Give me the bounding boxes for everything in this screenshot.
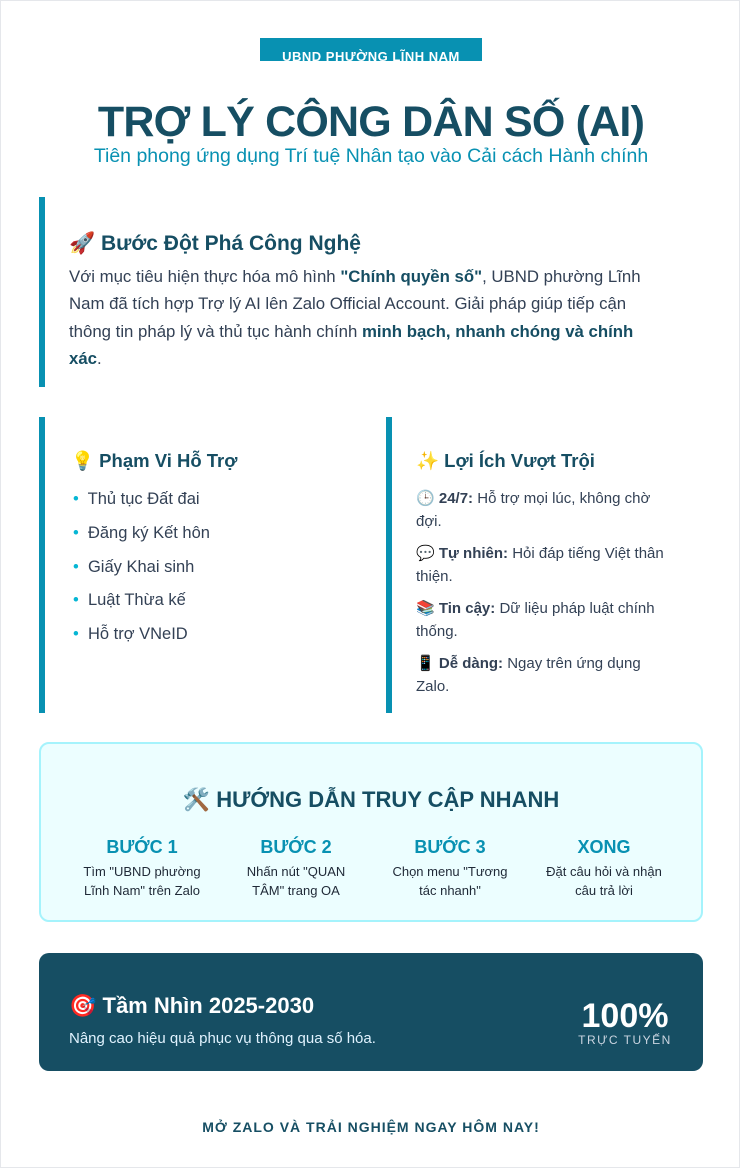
benefit list: 💬 Tự nhiên: Hỏi đáp tiếng Việt thân thiện.	[416, 545, 664, 585]
steps: Chọn menu "Tương	[392, 864, 508, 879]
steps: Lĩnh Nam" trên Zalo	[84, 883, 200, 898]
steps: BƯỚC 3	[414, 837, 486, 857]
list: • Thủ tục Đất đai	[73, 490, 200, 508]
steps: BƯỚC 1	[106, 837, 178, 857]
list: • Hỗ trợ VNeID	[73, 625, 188, 643]
steps: Tìm "UBND phường	[83, 864, 201, 879]
list: • Giấy Khai sinh	[73, 558, 194, 576]
steps: BƯỚC 2	[260, 837, 332, 857]
heading: 🛠️ HƯỚNG DẪN TRUY CẬP NHANH	[183, 787, 559, 812]
heading: 🎯 Tầm Nhìn 2025-2030	[69, 993, 314, 1018]
panel: scope	[39, 417, 238, 713]
steps: tác nhanh"	[419, 883, 481, 898]
benefit list: 🕒 24/7: Hỗ trợ mọi lúc, không chờ đợi.	[416, 490, 650, 530]
subtext: Nâng cao hiệu quả phục vụ thông qua số hóa.	[69, 1030, 376, 1047]
stat: 100%	[582, 997, 668, 1035]
panel: breakthrough	[39, 197, 641, 387]
heading: 🚀 Bước Đột Phá Công Nghệ	[69, 232, 361, 255]
heading: ✨ Lợi Ích Vượt Trội	[416, 450, 595, 471]
list	[73, 490, 210, 643]
steps: XONG	[577, 837, 630, 857]
heading: 💡 Phạm Vi Hỗ Trợ	[71, 450, 237, 471]
steps: Đặt câu hỏi và nhận	[546, 864, 662, 879]
footer call to action: MỞ ZALO VÀ TRẢI NGHIỆM NGAY HÔM NAY!	[202, 1119, 540, 1135]
steps: Nhấn nút "QUAN	[247, 864, 345, 879]
title: TRỢ LÝ CÔNG DÂN SỐ (AI)	[98, 98, 644, 146]
list: • Đăng ký Kết hôn	[73, 524, 210, 542]
steps: câu trả lời	[575, 883, 633, 898]
paragraph: Với mục tiêu hiện thực hóa mô hình "Chính quyền số", UBND phường Lĩnh Nam đã tích hợp Trợ lý AI lên Zalo Official Account. Giải pháp giúp tiếp cận thông tin pháp lý và thủ tục hành chính minh bạch, nhanh chóng và chính xác.	[69, 267, 641, 368]
subtitle: Tiên phong ứng dụng Trí tuệ Nhân tạo vào Cải cách Hành chính	[94, 145, 648, 167]
panel: benefits	[386, 417, 664, 713]
benefit list	[416, 490, 664, 695]
steps: TÂM" trang OA	[252, 883, 340, 898]
benefit list: 📱 Dễ dàng: Ngay trên ứng dụng Zalo.	[416, 655, 641, 695]
steps	[83, 836, 662, 898]
panel: quick access guide	[39, 742, 703, 922]
list: • Luật Thừa kế	[73, 591, 186, 609]
badge	[260, 38, 482, 61]
panel: vision	[39, 953, 703, 1071]
benefit list: 📚 Tin cậy: Dữ liệu pháp luật chính thống.	[416, 600, 655, 640]
stat: TRỰC TUYẾN	[578, 1033, 672, 1047]
